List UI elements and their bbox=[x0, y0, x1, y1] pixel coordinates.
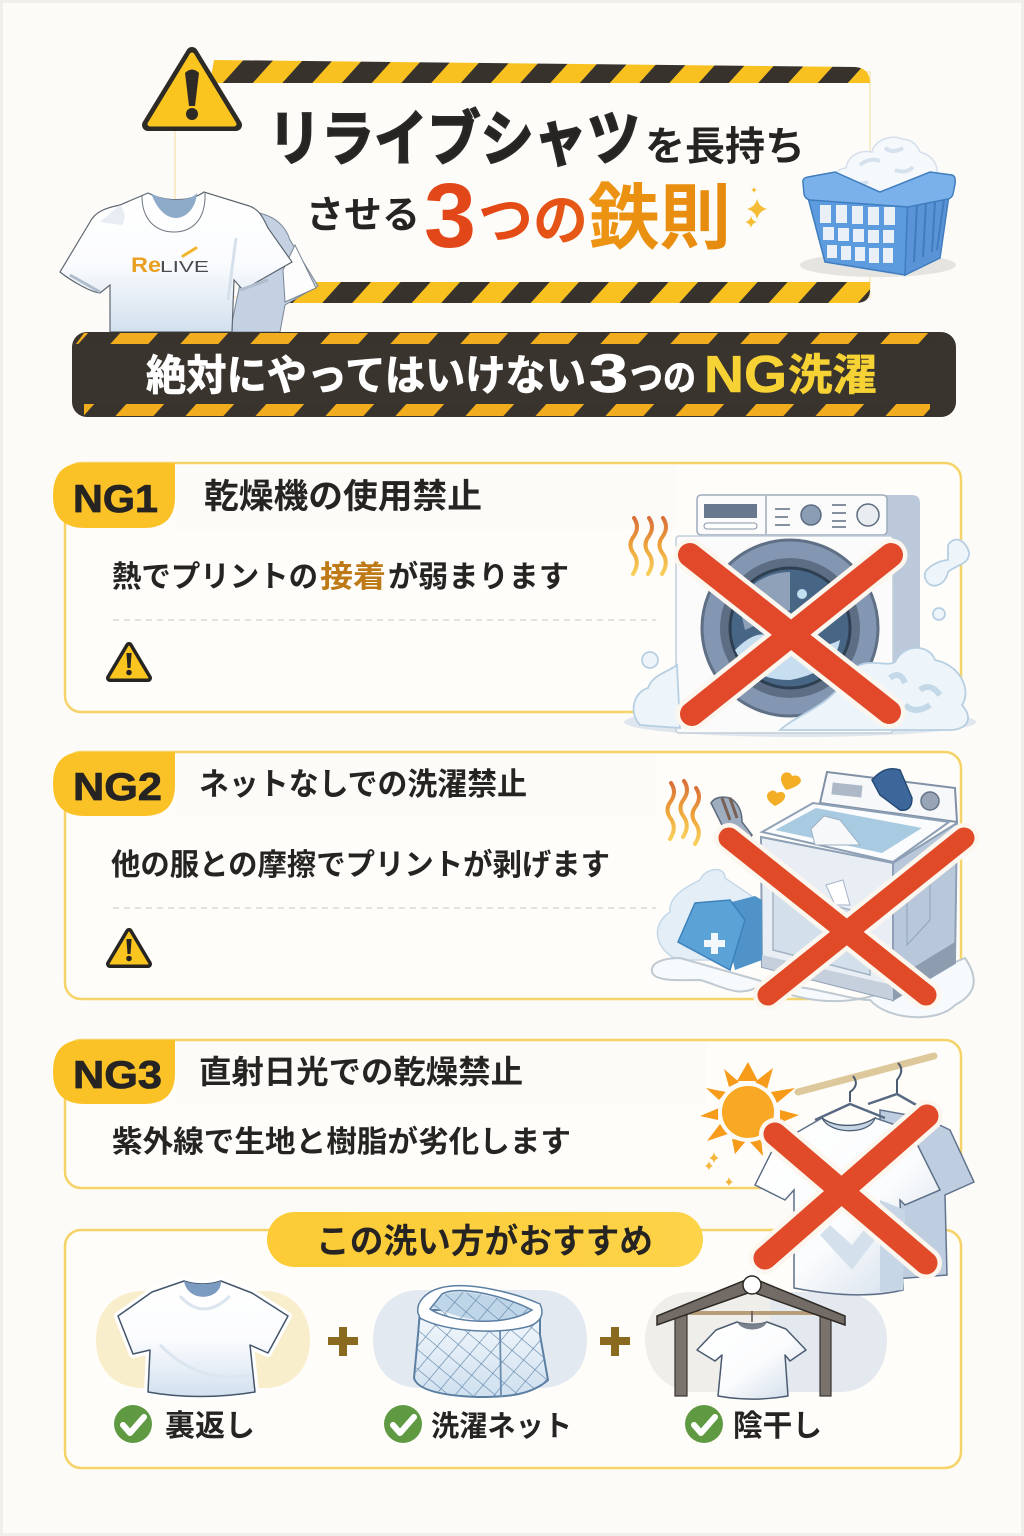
logo: LIVE bbox=[160, 259, 209, 276]
heat waves bbox=[668, 781, 699, 844]
heat waves bbox=[630, 518, 666, 574]
suds bbox=[634, 540, 969, 730]
badge bbox=[53, 752, 175, 816]
illustration: front-load dryer crossed out bbox=[624, 495, 976, 737]
badge bbox=[53, 463, 175, 528]
logo: Re bbox=[131, 254, 161, 277]
title line 1: リライブシャツ bbox=[268, 106, 640, 173]
icon: drying shelter bbox=[657, 1276, 845, 1399]
blob right bbox=[770, 1292, 887, 1392]
label: 裏返し bbox=[165, 1410, 255, 1443]
badge: NG2 bbox=[73, 766, 162, 809]
bottom hazard stripe bbox=[290, 282, 870, 303]
panel: NG1 bbox=[53, 463, 961, 712]
suds puddle bbox=[652, 958, 974, 1017]
hangers bbox=[850, 1063, 901, 1102]
illustration: sun-dried shirts crossed out bbox=[700, 1056, 974, 1295]
card bbox=[65, 1040, 961, 1188]
icon: plus bbox=[328, 1327, 358, 1356]
banner highlight NG: NG bbox=[704, 346, 787, 404]
panel: NG3 bbox=[53, 1040, 961, 1188]
banner number: 3 bbox=[589, 344, 628, 404]
description: 紫外線で生地と樹脂が劣化します bbox=[112, 1125, 571, 1159]
front shirt bbox=[755, 1118, 940, 1295]
red cross bbox=[729, 838, 964, 995]
icon: sun bbox=[700, 1062, 799, 1156]
card bbox=[65, 1230, 961, 1468]
item: shade drying bbox=[645, 1276, 887, 1443]
icon: laundry basket bbox=[800, 137, 956, 277]
illustration: top-load washer crossed out bbox=[652, 769, 974, 1017]
description: 熱でプリントの bbox=[112, 561, 318, 594]
check mark bbox=[384, 1405, 422, 1443]
panel frame bbox=[175, 72, 870, 297]
badge: NG1 bbox=[73, 478, 158, 521]
heading: 乾燥機の使用禁止 bbox=[204, 478, 482, 516]
header band bbox=[176, 1042, 706, 1105]
icon: warning triangle bbox=[148, 53, 236, 125]
divider bbox=[113, 619, 656, 621]
red cross bbox=[690, 555, 891, 714]
label: 陰干し bbox=[733, 1410, 822, 1443]
title text bbox=[268, 106, 805, 267]
title counter: つの bbox=[478, 189, 588, 252]
item: inside out bbox=[96, 1281, 310, 1443]
suds cloud bbox=[658, 870, 765, 960]
divider bbox=[113, 907, 656, 909]
description: 接着 bbox=[320, 561, 386, 594]
badge: NG3 bbox=[73, 1054, 162, 1097]
item: laundry net bbox=[373, 1286, 587, 1443]
red cross bbox=[765, 1116, 927, 1263]
blue pouch bbox=[720, 896, 762, 970]
icon: sparkles bbox=[745, 187, 767, 228]
description bbox=[112, 560, 569, 594]
description: が弱まります bbox=[388, 560, 569, 594]
title line 2 prefix: させる bbox=[306, 195, 420, 237]
washer body bbox=[761, 837, 893, 1000]
illustration: white relive t-shirt bbox=[60, 192, 318, 332]
panel: recommended washing bbox=[65, 1212, 961, 1468]
banner counter: つの bbox=[630, 357, 696, 398]
blob bbox=[96, 1291, 310, 1388]
icon: small warning bbox=[110, 932, 148, 964]
logo bbox=[131, 248, 209, 277]
badge bbox=[53, 1040, 175, 1104]
back shirt bbox=[880, 1110, 974, 1280]
title panel bbox=[175, 60, 870, 303]
icon: t-shirt bbox=[118, 1281, 288, 1396]
icon: plus bbox=[600, 1327, 630, 1356]
label: 洗濯ネット bbox=[431, 1410, 572, 1443]
drying rod bbox=[798, 1056, 934, 1092]
banner highlight word: 洗濯 bbox=[788, 352, 877, 400]
sparkles bbox=[705, 1152, 733, 1186]
icon: net basket bbox=[414, 1286, 548, 1397]
top hazard stripe bbox=[210, 60, 870, 83]
bottle bbox=[711, 797, 752, 860]
blob bbox=[373, 1290, 587, 1388]
check mark bbox=[685, 1405, 723, 1443]
heading: ネットなしでの洗濯禁止 bbox=[199, 767, 527, 802]
title number: 3 bbox=[424, 165, 476, 267]
icon: small warning bbox=[110, 646, 148, 678]
hearts bbox=[767, 772, 801, 806]
blob left bbox=[645, 1292, 770, 1392]
header band bbox=[176, 754, 656, 817]
pill heading: この洗い方がおすすめ bbox=[316, 1222, 653, 1261]
header band bbox=[176, 465, 676, 530]
description: 他の服との摩擦でプリントが剥げます bbox=[111, 848, 610, 882]
check mark bbox=[114, 1405, 152, 1443]
section banner bbox=[72, 332, 956, 417]
title highlight: 鉄則 bbox=[588, 179, 731, 259]
banner plate bbox=[72, 332, 956, 417]
pill heading bbox=[267, 1212, 703, 1267]
panel: NG2 bbox=[53, 752, 961, 999]
heading: 直射日光での乾燥禁止 bbox=[199, 1054, 523, 1090]
banner top stripes bbox=[76, 333, 944, 344]
banner bottom stripes bbox=[84, 404, 930, 416]
banner text: 絶対にやってはいけない bbox=[146, 352, 586, 399]
card bbox=[65, 752, 961, 999]
title line 1 suffix: を長持ち bbox=[645, 125, 805, 169]
card bbox=[65, 463, 961, 712]
